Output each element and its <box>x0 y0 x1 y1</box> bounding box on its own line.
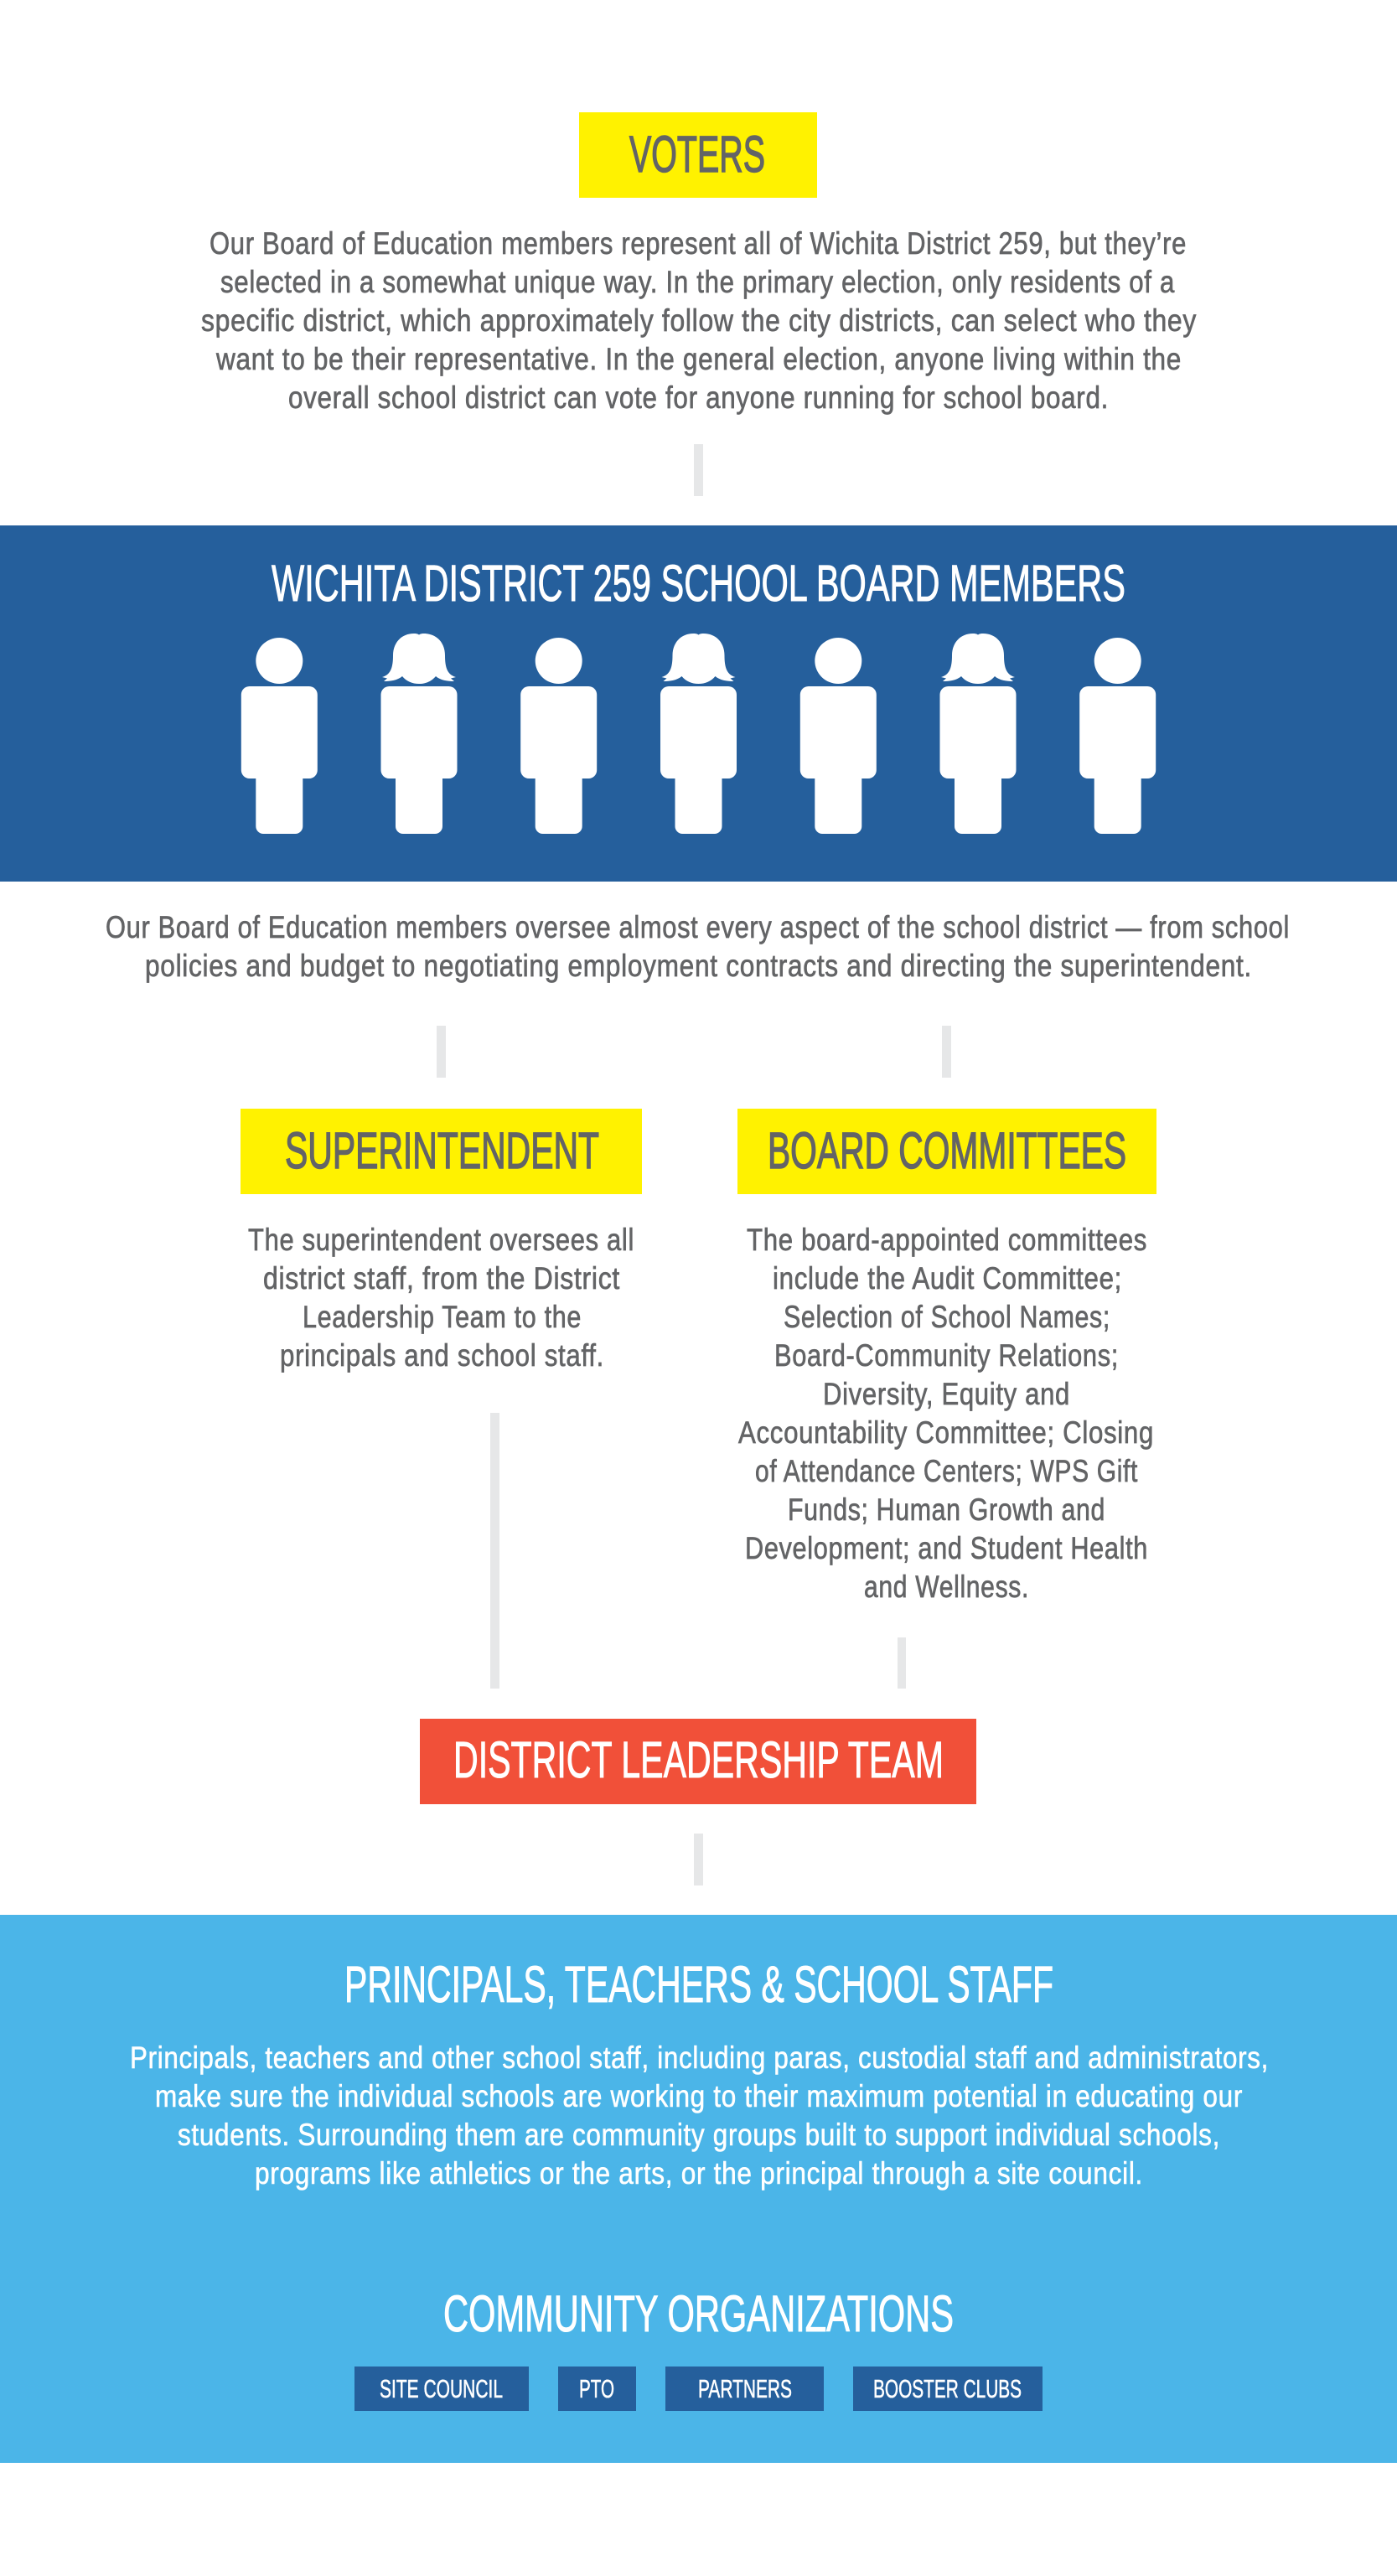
text block: committees description: Diversity, Equity and <box>823 1377 1070 1411</box>
connector: voters to board <box>694 444 703 496</box>
icon: board member 3 <box>520 638 597 834</box>
tag: pto <box>558 2367 636 2411</box>
text block: voters description: want to be their representative. In the general election, anyone living within the <box>215 342 1182 376</box>
heading: principals, teachers and school staff: PRINCIPALS, TEACHERS & SCHOOL STAFF <box>344 1956 1053 2013</box>
text block: committees description: Board-Community Relations; <box>774 1338 1119 1373</box>
tag: site council: SITE COUNCIL <box>380 2374 503 2403</box>
text block: committees description: Development; and Student Health <box>745 1531 1148 1565</box>
icon: board member 7 <box>1079 638 1156 834</box>
heading: superintendent: SUPERINTENDENT <box>285 1122 599 1179</box>
text block: staff description: programs like athletics or the arts, or the principal through a site council. <box>255 2156 1143 2191</box>
heading: community organizations: COMMUNITY ORGANIZATIONS <box>443 2285 954 2342</box>
icon: board member 5 <box>800 638 877 834</box>
text block: superintendent description: The superintendent oversees all <box>248 1223 634 1257</box>
heading: voters: VOTERS <box>629 126 765 183</box>
connector: board to superintendent <box>437 1026 446 1078</box>
text block: voters description: Our Board of Education members represent all of Wichita District 259, but they’re <box>210 226 1187 261</box>
tag: pto: PTO <box>579 2374 614 2403</box>
text block: superintendent description: principals and school staff. <box>280 1338 604 1373</box>
icon: board member 4 <box>660 634 737 834</box>
text block: staff description: students. Surrounding them are community groups built to support individual schools, <box>178 2118 1220 2152</box>
text block: committees description: Accountability Committee; Closing <box>738 1415 1154 1450</box>
text block: voters description: overall school district can vote for anyone running for school board. <box>288 380 1109 415</box>
heading: district leadership team: DISTRICT LEADERSHIP TEAM <box>453 1731 944 1788</box>
icon: board member 1 <box>241 638 318 834</box>
connector: board to committees <box>942 1026 951 1078</box>
tag: booster clubs <box>853 2367 1043 2411</box>
text block: superintendent description: district staff, from the District <box>263 1261 620 1296</box>
text block: committees description: Selection of School Names; <box>784 1300 1110 1334</box>
text block: board description <box>106 910 1290 983</box>
icon: board member 2 <box>380 634 458 834</box>
text block: staff description <box>130 2041 1269 2191</box>
icon: board member 6 <box>940 634 1016 834</box>
tag: partners: PARTNERS <box>698 2374 792 2403</box>
heading: board committees: BOARD COMMITTEES <box>768 1122 1126 1179</box>
text block: superintendent description <box>248 1223 634 1373</box>
heading: district leadership team <box>420 1719 976 1804</box>
text block: committees description <box>738 1223 1154 1604</box>
connector: leadership team to staff <box>694 1834 703 1885</box>
text block: committees description: and Wellness. <box>864 1570 1029 1604</box>
text block: voters description: specific district, which approximately follow the city districts, can select who they <box>201 303 1197 338</box>
text block: committees description: The board-appointed committees <box>747 1223 1147 1257</box>
text block: superintendent description: Leadership Team to the <box>303 1300 582 1334</box>
text block: committees description: of Attendance Centers; WPS Gift <box>755 1454 1138 1488</box>
heading: voters <box>579 112 817 198</box>
text block: staff description: make sure the individual schools are working to their maximum potential in educating our <box>155 2079 1243 2113</box>
connector: superintendent to leadership team <box>490 1413 499 1689</box>
text block: committees description: include the Audit Committee; <box>773 1261 1122 1296</box>
tag: booster clubs: BOOSTER CLUBS <box>873 2374 1022 2403</box>
panel: school board members <box>0 525 1397 882</box>
text block: voters description <box>201 226 1197 415</box>
tag: partners <box>665 2367 824 2411</box>
heading: board committees <box>737 1109 1156 1194</box>
tag: site council <box>354 2367 529 2411</box>
connector: committees to leadership team <box>898 1637 906 1689</box>
text block: voters description: selected in a somewhat unique way. In the primary election, only residents of a <box>220 265 1175 299</box>
heading: superintendent <box>241 1109 642 1194</box>
panel: principals, teachers and community <box>0 1915 1397 2463</box>
text block: committees description: Funds; Human Growth and <box>788 1492 1105 1527</box>
